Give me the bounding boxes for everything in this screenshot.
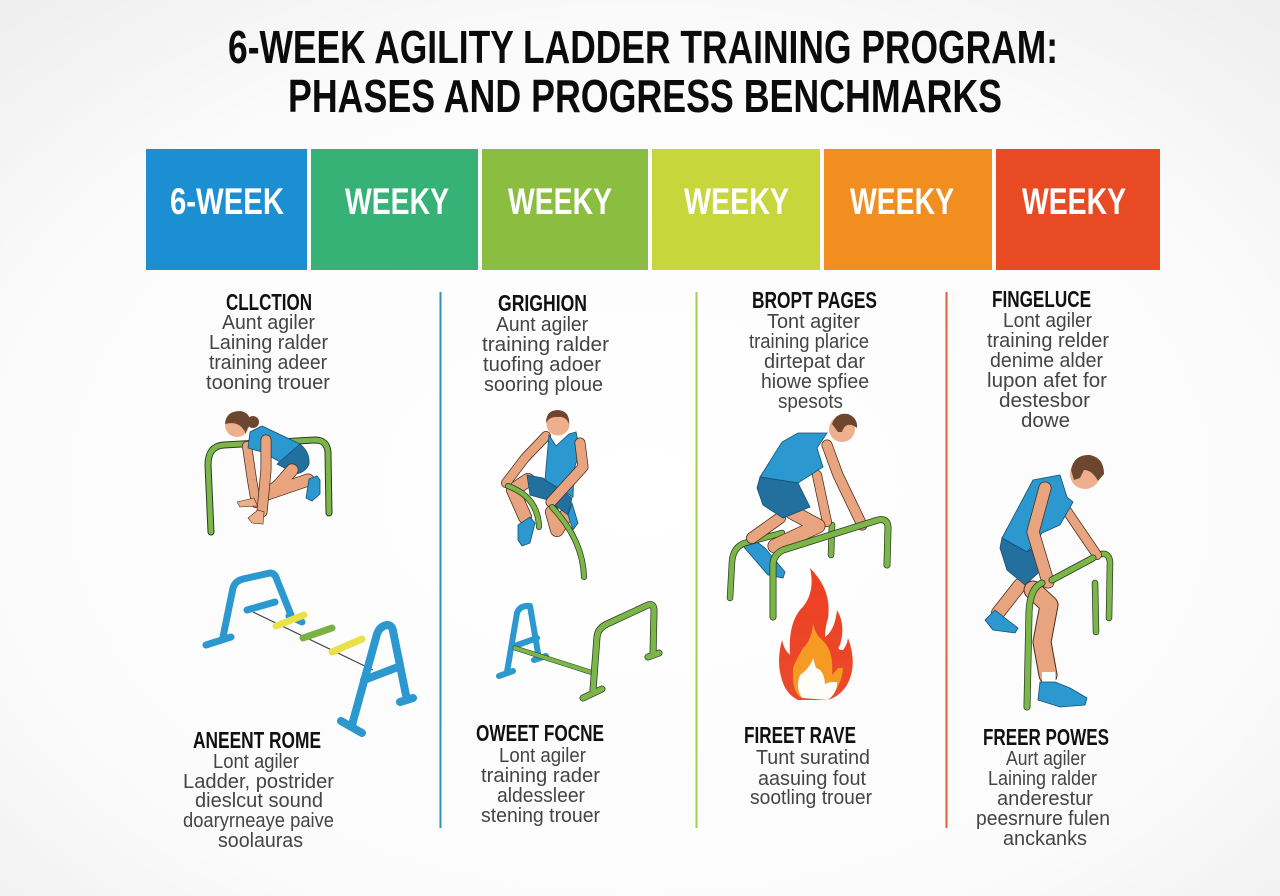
column 4 top text: destesbor	[999, 390, 1090, 412]
header block: weekly orange	[824, 149, 992, 270]
column 2 top text: Aunt agiler	[496, 314, 588, 336]
column 1 bottom text: doaryrneaye paive	[183, 810, 334, 832]
week header bar	[146, 149, 1160, 270]
column 1 bottom text: soolauras	[218, 830, 303, 852]
column 4 bottom text: Aurt agiler	[1006, 748, 1086, 770]
column 4 top text: dowe	[1021, 410, 1070, 432]
column 2 top text: GRIGHION	[498, 290, 587, 316]
column 3 bottom text: Tunt suratind	[756, 747, 870, 769]
column 1 top text: Aunt agiler	[222, 312, 315, 334]
column 1 top text	[206, 289, 330, 394]
title: PHASES AND PROGRESS BENCHMARKS	[288, 70, 1002, 122]
column 3 top text: training plarice	[749, 331, 869, 353]
header block: weekly lime	[482, 149, 648, 270]
column 2 bottom text	[476, 720, 604, 827]
column 4 bottom text: FREER POWES	[983, 724, 1109, 750]
column 1 bottom text: Ladder, postrider	[183, 771, 334, 793]
column 4 figure: athlete bent over hurdle	[985, 455, 1110, 707]
column 3 top text: Tont agiter	[767, 311, 860, 333]
column 4 top text: Lont agiler	[1003, 310, 1092, 332]
column 1 top text: Laining ralder	[209, 332, 328, 354]
column 3 bottom text: aasuing fout	[758, 768, 866, 790]
column 2 bottom text: Lont agiler	[499, 745, 586, 767]
column 2 bottom text: training rader	[481, 765, 600, 787]
column 1 figure: crouching athlete over hurdle	[208, 411, 329, 532]
column 3 top text	[749, 287, 877, 413]
column 4 bottom text	[976, 724, 1110, 850]
column divider green	[696, 292, 698, 828]
header block: weekly yellow-green	[652, 149, 820, 270]
column 2 bottom text: aldessleer	[497, 785, 585, 807]
column 3 top text: dirtepat dar	[764, 351, 865, 373]
column 4 top text: training relder	[987, 330, 1109, 352]
column 3 top text: hiowe spfiee	[761, 371, 869, 393]
header block: weekly orange: WEEKY	[850, 181, 954, 222]
title: 6-WEEK AGILITY LADDER TRAINING PROGRAM:	[228, 21, 1058, 73]
column 4 top text: lupon afet for	[987, 370, 1107, 392]
column 3 icon: flame	[779, 568, 853, 700]
column 2 top text: sooring ploue	[484, 374, 603, 396]
column 3 top text: spesots	[778, 391, 843, 413]
column 4 bottom text: anderestur	[997, 788, 1093, 810]
column divider blue	[440, 292, 442, 828]
column 1 top text: CLLCTION	[226, 289, 312, 315]
column 3 top text: BROPT PAGES	[752, 287, 877, 313]
column 1 bottom text: Lont agiler	[213, 751, 299, 773]
column 3 bottom text	[744, 722, 872, 809]
header block: 6-week	[146, 149, 307, 270]
column 3 bottom text: FIREET RAVE	[744, 722, 856, 748]
column 2 bottom text: OWEET FOCNE	[476, 720, 604, 746]
header block: 6-week: 6-WEEK	[170, 181, 284, 222]
column 4 top text: denime alder	[990, 350, 1103, 372]
column 4 bottom text: peesrnure fulen	[976, 808, 1110, 830]
column 2 top text	[482, 290, 609, 396]
column 1 icon: blue and yellow ladder	[206, 573, 413, 733]
header block: weekly lime: WEEKY	[508, 181, 612, 222]
header block: weekly green: WEEKY	[345, 181, 449, 222]
header block: weekly red: WEEKY	[1022, 181, 1126, 222]
column 4 top text	[987, 286, 1109, 432]
column 4 bottom text: Laining ralder	[988, 768, 1097, 790]
column 1 top text: tooning trouer	[206, 372, 330, 394]
column 2 bottom text: stening trouer	[481, 805, 600, 827]
column 1 bottom text	[183, 727, 334, 852]
column 4 top text: FINGELUCE	[992, 286, 1091, 312]
column 1 bottom text: dieslcut sound	[195, 790, 323, 812]
column 2 top text: training ralder	[482, 334, 609, 356]
column 2 figure: athlete jumping with hurdle	[506, 410, 584, 577]
column 4 bottom text: anckanks	[1003, 828, 1087, 850]
header block: weekly red	[996, 149, 1160, 270]
column 1 bottom text: ANEENT ROME	[193, 727, 321, 753]
column 1 top text: training adeer	[209, 352, 327, 374]
column 3 bottom text: sootling trouer	[750, 787, 872, 809]
title	[228, 21, 1058, 122]
header block: weekly green	[311, 149, 478, 270]
column 2 icon: blue and green hurdles	[499, 605, 659, 698]
column 3 figure: athlete stepping over hurdle	[730, 414, 888, 617]
column divider red	[946, 292, 948, 828]
column 2 top text: tuofing adoer	[483, 354, 601, 376]
header block: weekly yellow-green: WEEKY	[684, 181, 789, 222]
